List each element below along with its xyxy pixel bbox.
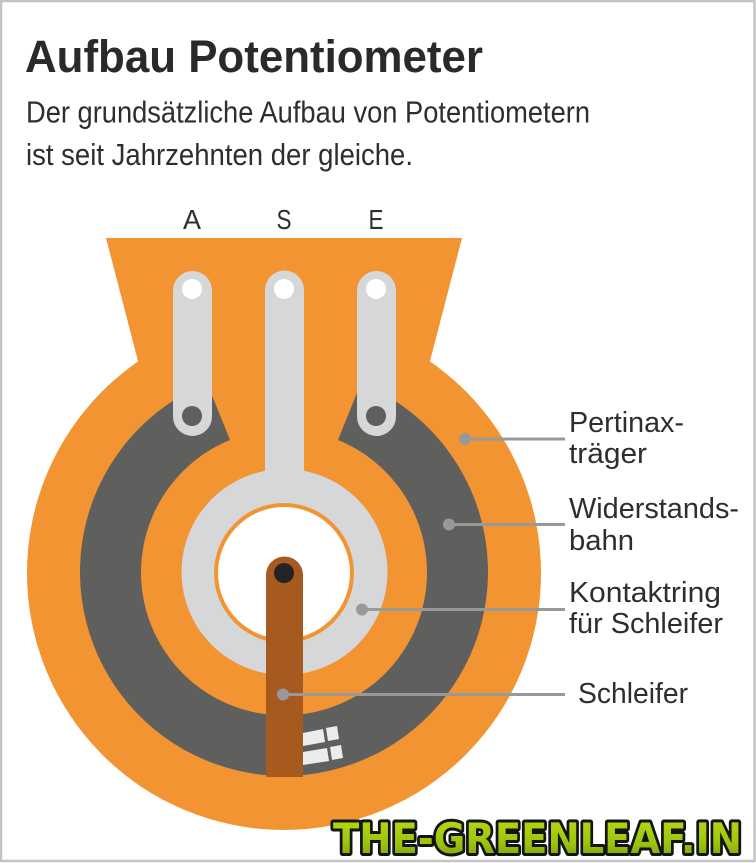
subtitle (26, 94, 590, 172)
label: Pertinaxträger (569, 407, 684, 470)
terminal labels (183, 204, 384, 235)
label: Pertinaxträger: Pertinax- (569, 407, 684, 439)
terminal S hole (274, 279, 294, 299)
leader: Kontaktring (356, 604, 565, 616)
label: Widerstandsbahn: Widerstands- (569, 493, 739, 525)
label: Widerstandsbahn: bahn (569, 525, 634, 557)
center opening (216, 505, 352, 641)
panel: pertinax carrier (27, 238, 541, 830)
leader: Pertinaxträger (459, 433, 565, 445)
wiper (266, 557, 303, 777)
label: Pertinaxträger: träger (569, 438, 647, 470)
subtitle: ist seit Jahrzehnten der gleiche. (26, 137, 413, 172)
potentiometer diagram (27, 238, 541, 830)
subtitle: Der grundsätzliche Aufbau von Potentiometern (26, 94, 590, 130)
leader: Schleifer (277, 688, 565, 700)
terminal E (357, 271, 396, 436)
label: Kontaktring: für Schleifer (569, 608, 723, 640)
label: Schleifer: Schleifer (578, 678, 688, 710)
terminal labels: E (368, 204, 384, 235)
leader: Widerstandsbahn (443, 518, 565, 530)
label: Widerstandsbahn (569, 493, 739, 557)
label: Kontaktring (569, 577, 723, 640)
title: Aufbau Potentiometer (25, 31, 483, 82)
contact ring with S terminal (182, 270, 388, 675)
label: Kontaktring: Kontaktring (569, 577, 721, 609)
track markings (303, 726, 343, 765)
terminal labels: A (183, 204, 201, 235)
terminal A (173, 271, 212, 436)
terminal labels: S (276, 204, 292, 235)
resistive track (80, 383, 488, 776)
